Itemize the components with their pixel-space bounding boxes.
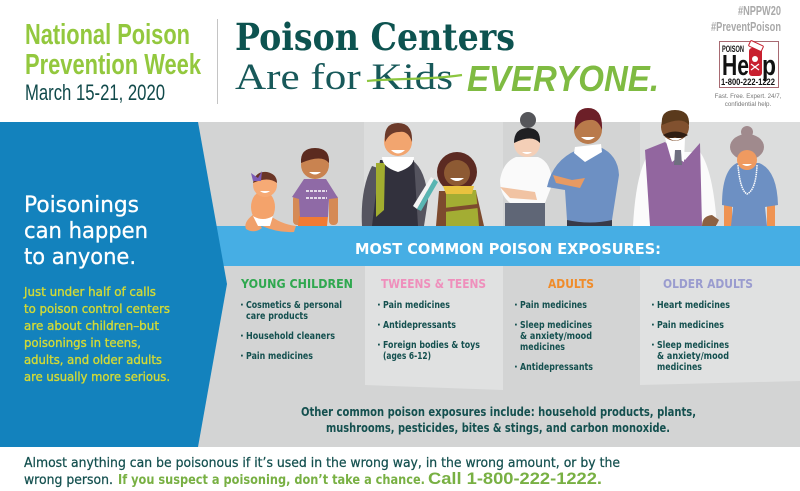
column: adults [514, 277, 594, 373]
column: tweens and teens: (ages 6-12) [383, 351, 431, 362]
logo caption [715, 93, 782, 108]
panel heading [24, 193, 148, 270]
column: young children: Cosmetics & personal [246, 300, 342, 311]
headline [235, 15, 659, 99]
column: adults: Sleep medicines [520, 320, 592, 331]
figure: woman [500, 112, 552, 226]
column: young children: Household cleaners [246, 331, 335, 342]
panel heading: can happen [24, 219, 148, 244]
footer message: Almost anything can be poisonous if it’s used in the wrong way, in the wrong amount, or by the [24, 456, 620, 471]
blue band [200, 226, 800, 266]
column: tweens and teens: · [377, 320, 381, 331]
column: older adults: medicines [657, 362, 702, 373]
other exposures note [301, 405, 696, 435]
column: tweens and teens: · [377, 300, 381, 311]
figure: older woman [722, 126, 778, 226]
figure: teen boy [362, 123, 428, 226]
logo: poison help [720, 40, 778, 88]
column: older adults: · [651, 340, 655, 351]
panel text: poisonings in teens, [24, 336, 141, 350]
column: tweens and teens: · [377, 340, 381, 351]
panel text [23, 285, 170, 384]
logo: poison help: POISON [722, 44, 744, 54]
header: event title: March 15-21, 2020 [25, 80, 165, 105]
column: older adults: Sleep medicines [657, 340, 729, 351]
main gray background [190, 122, 800, 447]
logo: poison help: 1-800-222-1222 [721, 77, 775, 87]
other exposures note: Other common poison exposures include: household products, plants, [301, 405, 696, 419]
blue side panel [0, 122, 227, 447]
figure: teen girl [436, 152, 484, 226]
hashtags: #NPPW20 [738, 4, 781, 18]
figure: books [413, 177, 438, 211]
figure: baby [245, 171, 296, 232]
column: young children: · [240, 300, 244, 311]
column: older adults: & anxiety/mood [657, 351, 729, 362]
lighter column panels [365, 266, 503, 390]
panel heading: Poisonings [24, 193, 139, 218]
column: tweens and teens [377, 277, 486, 362]
column: adults: · [514, 362, 518, 373]
column: older adults: OLDER ADULTS [663, 277, 753, 291]
panel text: are about children–but [24, 319, 159, 333]
header: event title [25, 19, 202, 105]
column: tweens and teens: Foreign bodies & toys [383, 340, 480, 351]
column: tweens and teens: Antidepressants [383, 320, 456, 331]
column: young children [240, 277, 353, 362]
hashtags [711, 4, 781, 34]
column: adults: Pain medicines [520, 300, 587, 311]
panel heading: to anyone. [24, 245, 136, 270]
column: adults: & anxiety/mood [520, 331, 592, 342]
panel text: adults, and older adults [24, 353, 162, 367]
column: young children: care products [246, 311, 308, 322]
header: event title: Prevention Week [25, 49, 202, 81]
logo: poison help: He [722, 50, 749, 82]
figure: older man [633, 110, 719, 226]
footer message: If you suspect a poisoning, don’t take a chance. [118, 473, 425, 488]
blue band: MOST COMMON POISON EXPOSURES: [355, 240, 661, 258]
column: young children: Pain medicines [246, 351, 313, 362]
figure: adult man [547, 108, 619, 226]
panel text: Just under half of calls [23, 285, 156, 299]
footer message [24, 456, 620, 488]
header: event title: National Poison [25, 19, 190, 51]
headline: Are for Kids [235, 57, 453, 98]
column: adults: medicines [520, 342, 565, 353]
figure: boy [292, 148, 338, 226]
other exposures note: mushrooms, pesticides, bites & stings, and carbon monoxide. [326, 421, 670, 435]
column: adults: ADULTS [548, 277, 594, 291]
column: older adults: Pain medicines [657, 320, 724, 331]
logo: poison help: p [762, 50, 776, 82]
logo caption: Fast. Free. Expert. 24/7, [715, 93, 782, 100]
logo caption: confidential help. [725, 101, 771, 108]
column: older adults: Heart medicines [657, 300, 730, 311]
column: older adults: · [651, 300, 655, 311]
footer message: wrong person. [24, 473, 113, 488]
panel text: are usually more serious. [24, 370, 170, 384]
footer message: Call 1-800-222-1222. [428, 469, 602, 488]
headline: Poison Centers [235, 15, 515, 59]
column: tweens and teens: Pain medicines [383, 300, 450, 311]
column: adults: · [514, 320, 518, 331]
column: adults: Antidepressants [520, 362, 593, 373]
column: adults: · [514, 300, 518, 311]
column: tweens and teens: TWEENS & TEENS [381, 277, 486, 291]
column: older adults [651, 277, 753, 373]
panel text: to poison control centers [24, 302, 170, 316]
column: young children: · [240, 351, 244, 362]
headline: EVERYONE. [467, 58, 659, 99]
column: older adults: · [651, 320, 655, 331]
column: young children: · [240, 331, 244, 342]
column: young children: YOUNG CHILDREN [240, 277, 353, 291]
